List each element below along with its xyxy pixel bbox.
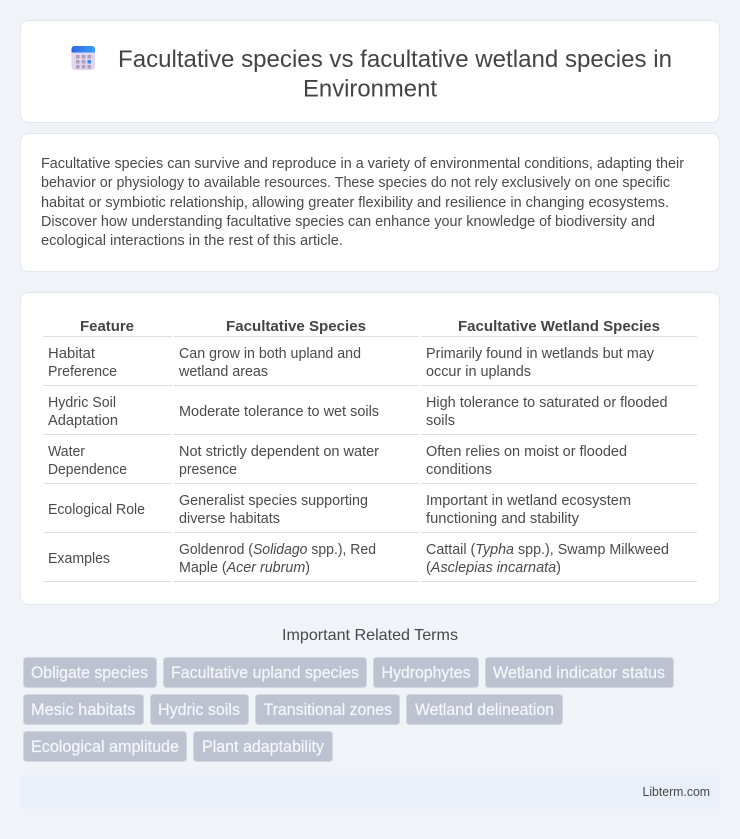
row: water dependence: Water [48,444,85,460]
table header [80,319,660,335]
row: hydric soil adaptation: Adaptation [48,413,118,429]
row: examples: Maple (Acer rubrum) [179,560,310,576]
row: ecological role: Ecological Role [48,502,145,518]
row: water dependence: conditions [426,462,492,478]
title: Environment [303,76,437,102]
panel: comparison table [20,292,720,604]
row: habitat preference [48,346,655,380]
row: ecological role: Important in wetland ecosystem [426,493,631,509]
row: hydric soil adaptation: soils [426,413,455,429]
row: water dependence: Dependence [48,462,127,478]
row: habitat preference: occur in uplands [426,364,531,380]
row: ecological role: diverse habitats [179,511,280,527]
table header: Feature [80,319,134,335]
footer: Libterm.com [642,785,710,799]
row: habitat preference: wetland areas [178,364,268,380]
row: water dependence: Often relies on moist or flooded [426,444,627,460]
related term tags: Mesic habitats [31,701,136,719]
related term tags: Obligate species [31,664,148,682]
panel: introduction: habitat or symbiotic relationship, allowing greater flexibility and resilience in changing ecosystems. [41,195,669,211]
row: examples: Goldenrod (Solidago spp.), Red [179,542,376,558]
row: hydric soil adaptation: Hydric Soil [48,395,116,411]
related term tags: Ecological amplitude [31,738,179,756]
panel: introduction: Facultative species can survive and reproduce in a variety of environmental conditions, adapting their [41,156,684,172]
related term tags [24,658,674,762]
row: ecological role: Generalist species supporting [179,493,368,509]
panel: introduction: behavior or physiology to available resources. These species do not rely exclusively on one specific [41,175,670,191]
row: hydric soil adaptation: High tolerance to saturated or flooded [426,395,668,411]
related term tags: Hydric soils [158,701,240,719]
row: ecological role [48,493,631,527]
related term tags: Wetland indicator status [493,664,665,682]
footer [20,775,720,809]
row: hydric soil adaptation [48,395,668,429]
related term tags: Transitional zones [264,701,392,719]
table header: Facultative Wetland Species [458,319,660,335]
row: habitat preference: Can grow in both upland and [179,346,361,362]
row: examples: Cattail (Typha spp.), Swamp Milkweed [426,542,669,558]
row: habitat preference: Primarily found in wetlands but may [426,346,655,362]
panel: title card [20,20,720,122]
related term tags: Hydrophytes [382,664,470,682]
row: water dependence: Not strictly dependent on water [179,444,379,460]
row: examples [48,542,669,576]
row: habitat preference: Habitat [48,346,95,362]
icon: calendar [71,46,95,70]
row: hydric soil adaptation: Moderate tolerance to wet soils [179,404,379,420]
row: water dependence: presence [179,462,237,478]
row: examples: Examples [48,551,110,567]
title: Facultative species vs facultative wetland species in [118,46,672,73]
table header: Facultative Species [226,319,366,335]
row: habitat preference: Preference [48,364,117,380]
panel: introduction [20,134,720,272]
related term tags: Facultative upland species [171,664,359,682]
related term tags: Wetland delineation [415,701,554,719]
row: ecological role: functioning and stability [426,511,580,527]
panel: introduction: Discover how understanding facultative species can enhance your knowledge of biodiversity and [41,214,655,230]
title [118,46,672,102]
row: water dependence [48,444,627,478]
heading: important related terms: Important Related Terms [282,627,458,644]
row: examples: (Asclepias incarnata) [426,560,561,576]
panel: introduction: ecological interactions in the rest of this article. [41,233,343,249]
related term tags: Plant adaptability [202,738,325,756]
